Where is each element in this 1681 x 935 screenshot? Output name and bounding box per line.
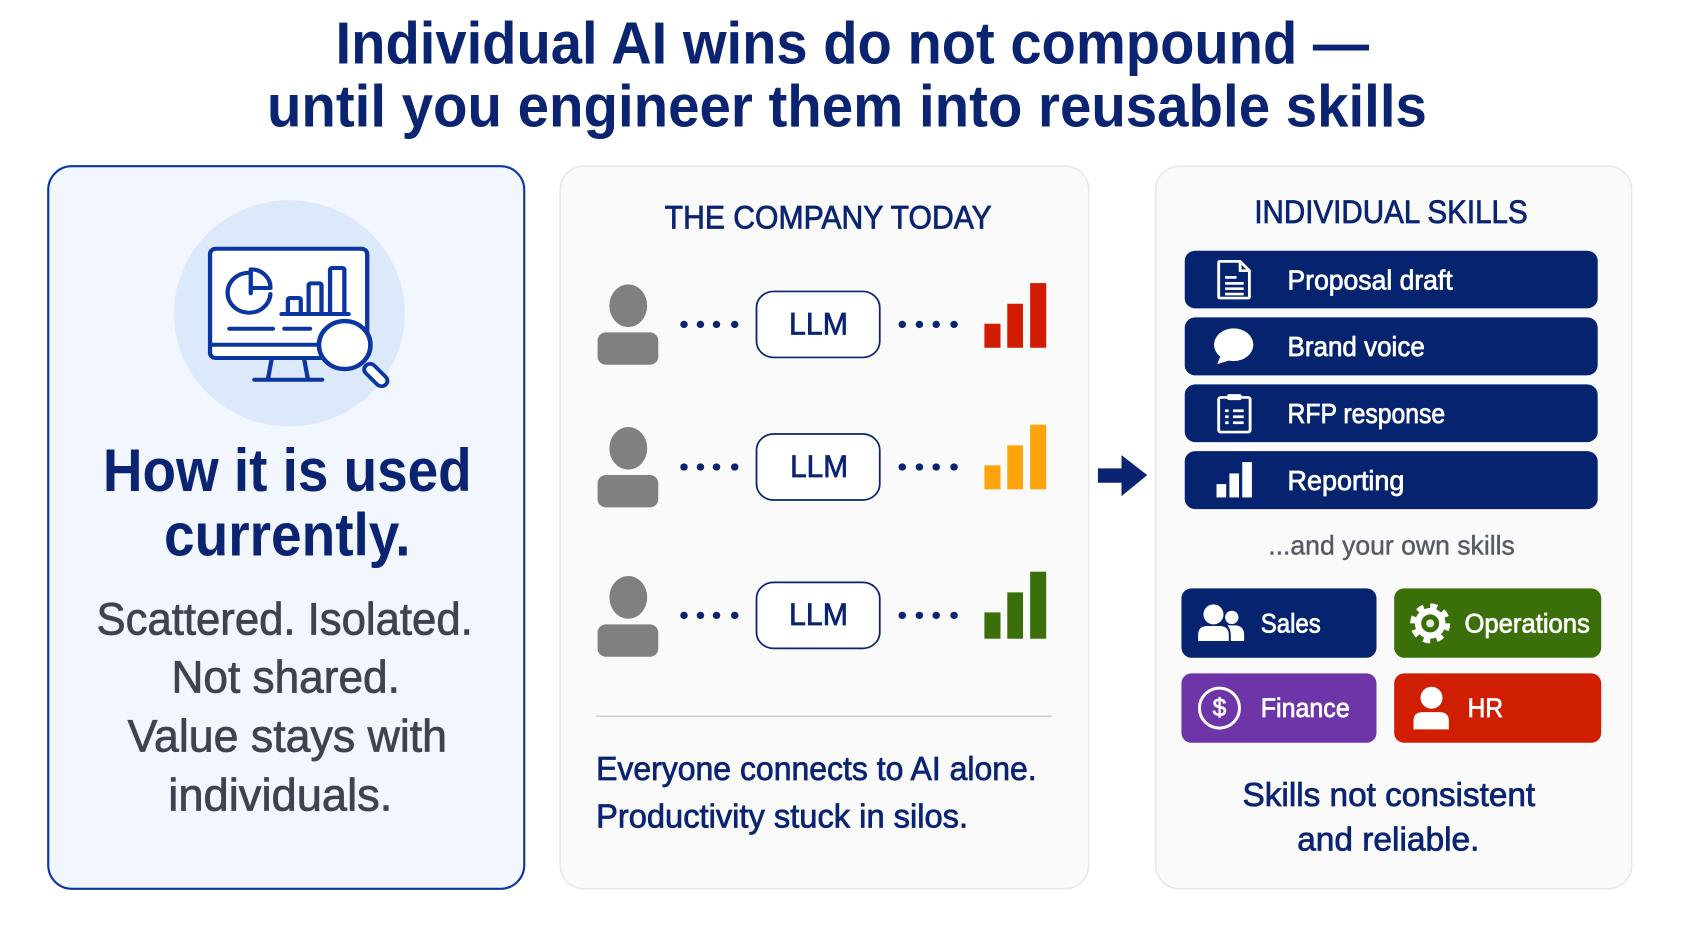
- chip: hr: [1394, 673, 1601, 743]
- panel: the company today: [560, 166, 1089, 889]
- label: LLM row 1: LLM: [789, 307, 848, 342]
- skill: brand voice: Brand voice: [1288, 331, 1425, 362]
- text block: skills not consistent: [1243, 777, 1535, 859]
- heading: how it is used currently: currently.: [164, 501, 411, 568]
- row 2: person to LLM to orange bars: [598, 425, 1046, 507]
- text block: skills not consistent: and reliable.: [1297, 822, 1479, 859]
- heading: how it is used currently: [103, 437, 472, 568]
- heading: how it is used currently: How it is used: [103, 437, 472, 504]
- text block: everyone connects to AI alone: [596, 751, 1037, 836]
- panel: how it is used currently: [48, 166, 524, 889]
- skill: rfp response: RFP response: [1288, 398, 1445, 429]
- text: and your own skills: ...and your own skills: [1268, 530, 1515, 560]
- title: until you engineer them into reusable skills: [267, 75, 1427, 140]
- chip: operations: Operations: [1464, 609, 1590, 639]
- title: Individual AI wins do not compound —: [336, 11, 1369, 76]
- skill: rfp response: [1185, 384, 1598, 442]
- text block: everyone connects to AI alone: Productivity stuck in silos.: [596, 799, 968, 836]
- chip: sales: Sales: [1261, 609, 1321, 639]
- skill: proposal draft: Proposal draft: [1288, 264, 1453, 295]
- chip: operations: [1394, 588, 1601, 658]
- skill: reporting: Reporting: [1288, 465, 1404, 496]
- text block: scattered, isolated: Not shared.: [172, 652, 400, 703]
- text block: scattered, isolated: Scattered. Isolated.: [96, 594, 473, 645]
- panel: individual skills: [1156, 166, 1632, 889]
- text block: skills not consistent: Skills not consistent: [1243, 777, 1535, 814]
- skill: proposal draft: [1185, 251, 1598, 308]
- label: LLM row 3: LLM: [789, 597, 848, 632]
- heading: the company today: THE COMPANY TODAY: [665, 199, 992, 235]
- chip: finance: [1181, 673, 1376, 743]
- chip: hr: HR: [1468, 693, 1503, 723]
- skill: brand voice: [1185, 317, 1598, 375]
- row 1: person to LLM to red bars: [598, 283, 1046, 365]
- skill: reporting: [1185, 451, 1598, 509]
- text block: everyone connects to AI alone: Everyone connects to AI alone.: [596, 751, 1037, 788]
- chip: sales: [1181, 588, 1376, 658]
- heading: individual skills: INDIVIDUAL SKILLS: [1254, 194, 1528, 230]
- title: [267, 11, 1427, 140]
- chip: finance: $: [1213, 695, 1227, 722]
- text block: scattered, isolated: Value stays with: [128, 711, 447, 762]
- arrow: [1098, 455, 1147, 496]
- text block: scattered, isolated: individuals.: [168, 770, 392, 821]
- icon: monitor dashboard with magnifier: [174, 200, 405, 426]
- chip: finance: Finance: [1261, 693, 1350, 723]
- text block: scattered, isolated: [96, 594, 473, 821]
- row 3: person to LLM to green bars: [598, 572, 1046, 657]
- label: LLM row 2: LLM: [790, 449, 848, 484]
